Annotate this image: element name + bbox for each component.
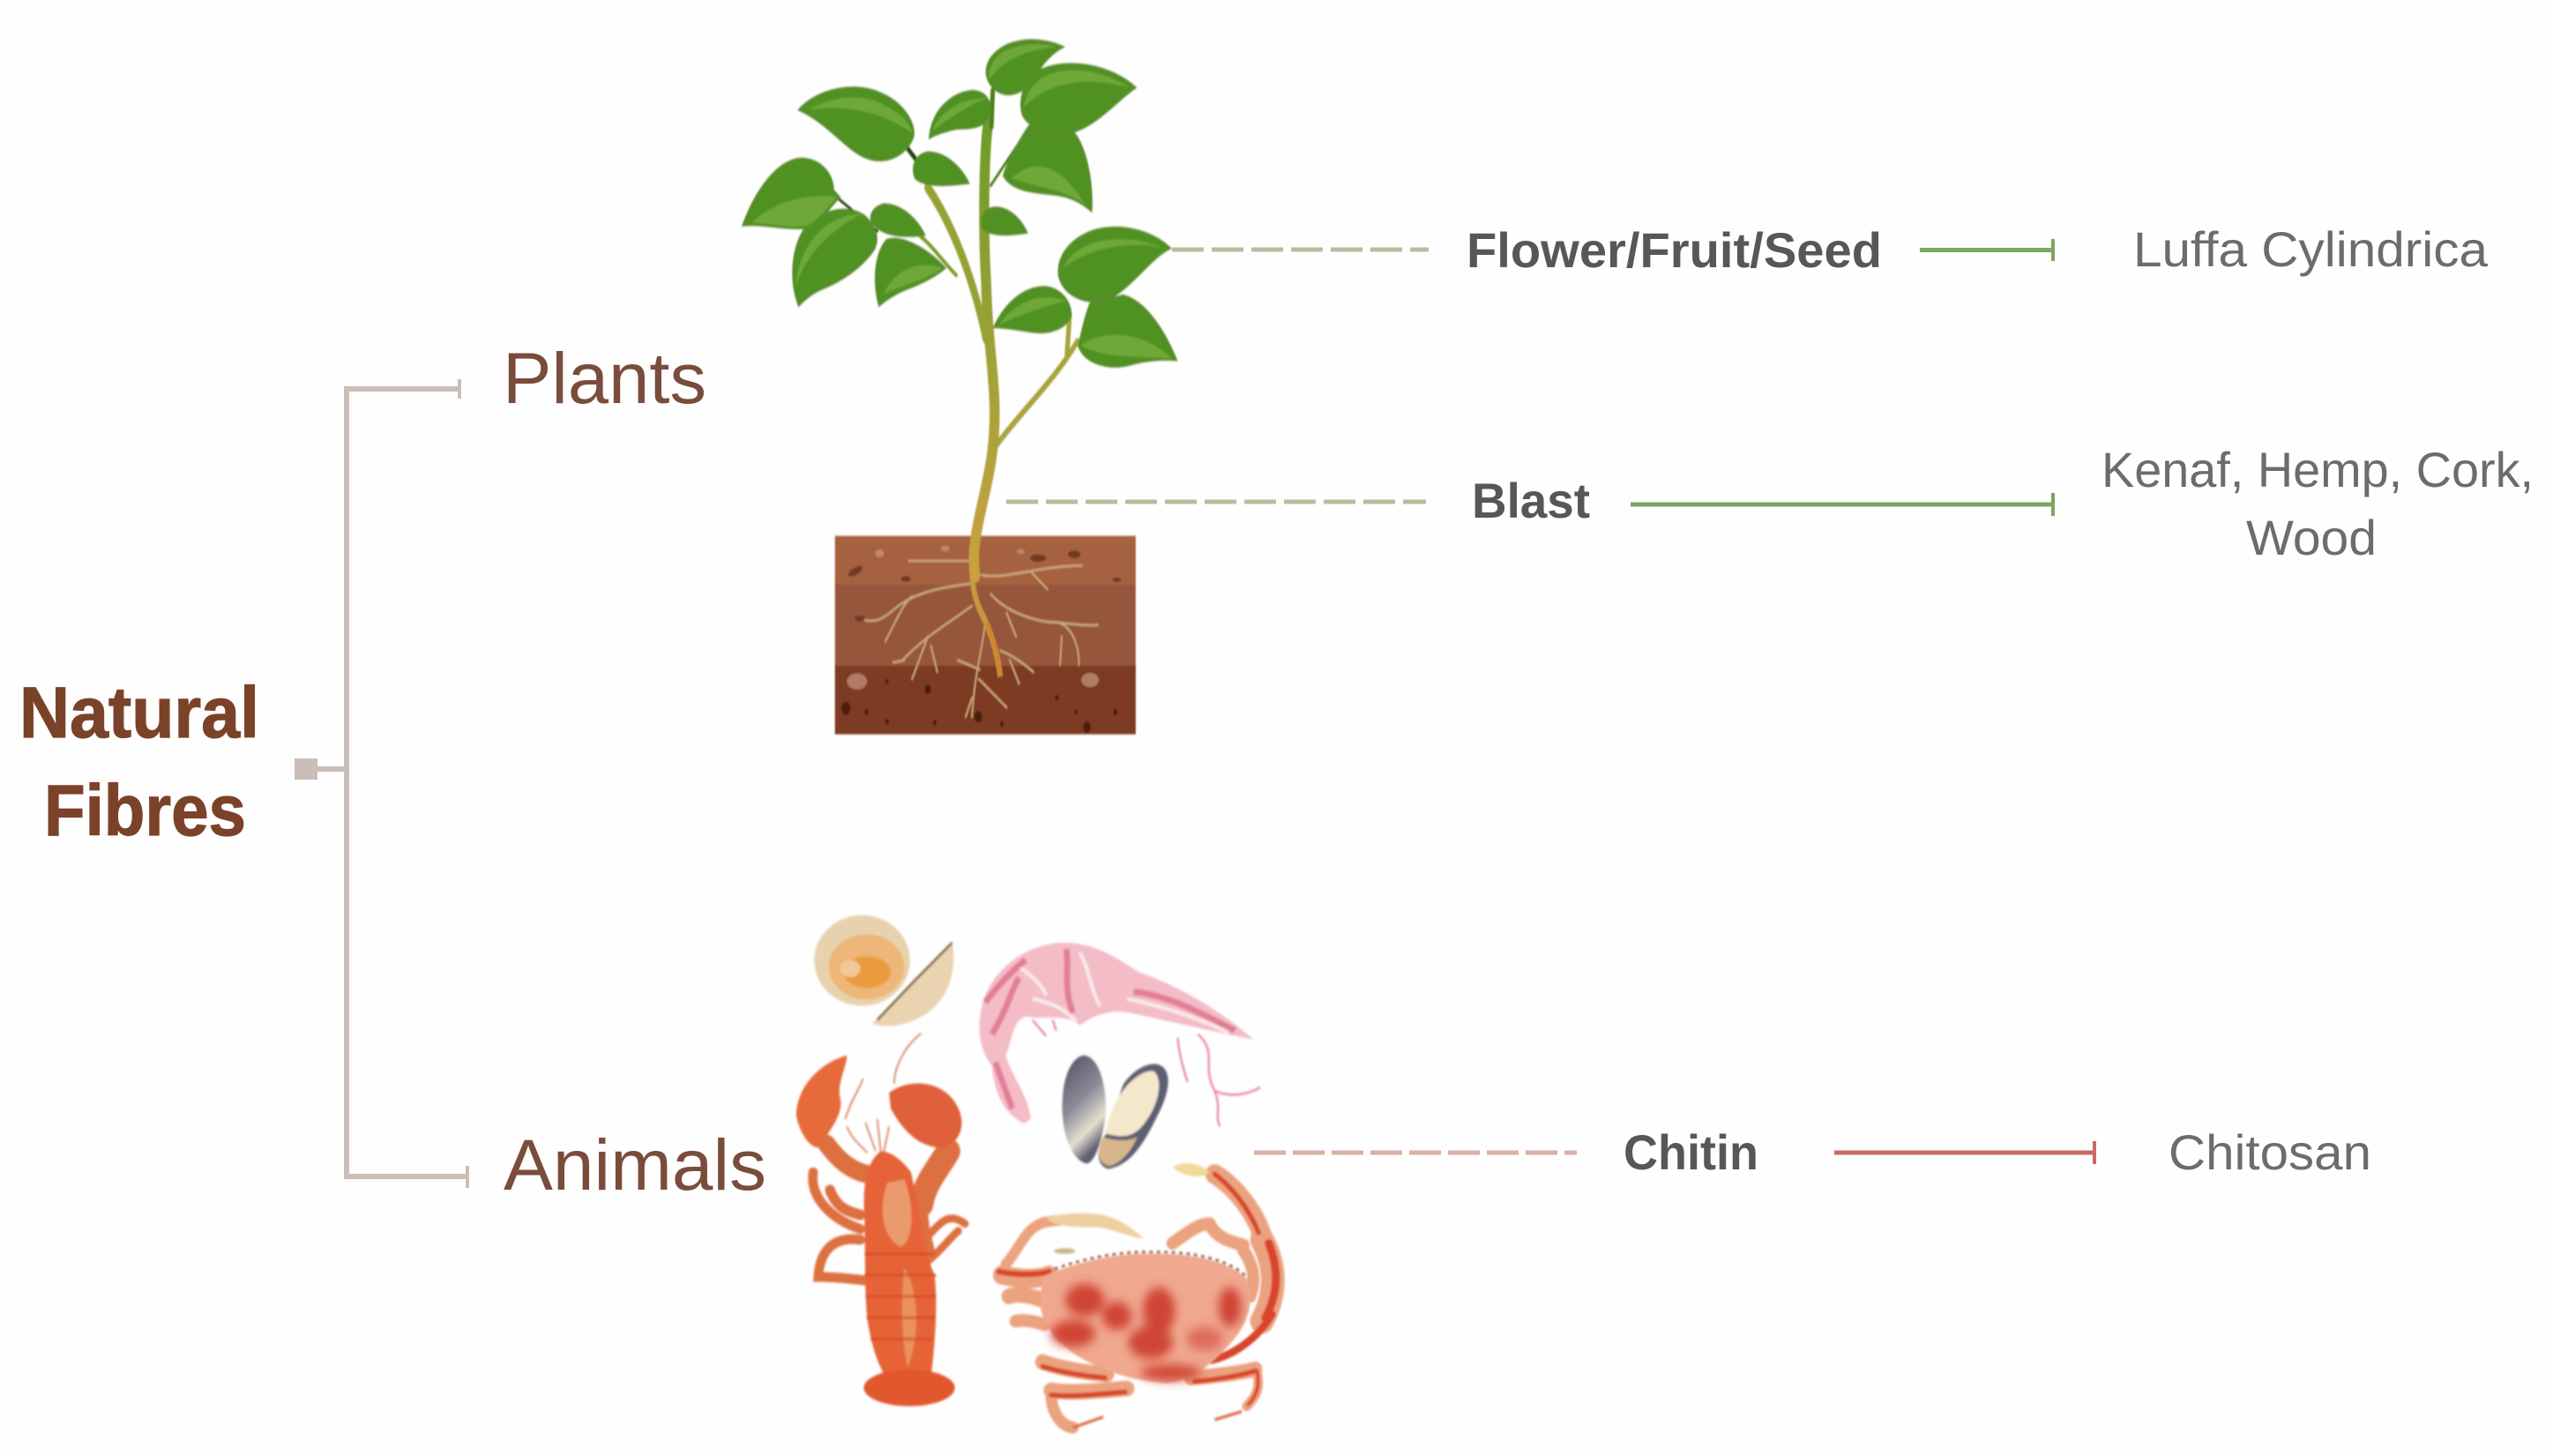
title: Natural Fibres: Fibres: [44, 771, 246, 851]
roots: [865, 561, 1098, 717]
shrimp: [980, 943, 1260, 1126]
branch: Chitin: Chitosan: [2169, 1124, 2371, 1180]
illustration: plant with soil and roots: [743, 41, 1176, 735]
branch: Flower/Fruit/Seed: Luffa Cylindrica: [2133, 221, 2489, 277]
branch: Blast: [1006, 442, 2534, 565]
crab: [999, 1163, 1276, 1428]
soil block: [835, 536, 1136, 735]
branch: Flower/Fruit/Seed: Flower/Fruit/Seed: [1467, 222, 1882, 278]
branch: Blast: Wood: [2246, 510, 2377, 565]
branch: Flower/Fruit/Seed: [1172, 221, 2489, 278]
heading: Plants: Plants: [503, 339, 706, 419]
title: Natural Fibres: [19, 673, 259, 851]
title: Natural Fibres: Natural: [19, 673, 259, 753]
leaf highlights: [751, 44, 1172, 359]
branch: Chitin: [1254, 1124, 2371, 1180]
heading: Animals: Animals: [504, 1125, 766, 1206]
illustration: shellfish and crustaceans: [796, 915, 1276, 1428]
lobster: [796, 1034, 965, 1407]
stems: [837, 91, 1078, 575]
branch: Blast: Blast: [1472, 473, 1590, 528]
scallop: [814, 915, 953, 1026]
bracket connector: [295, 379, 468, 1188]
leaves: [743, 41, 1176, 367]
branch: Blast: Kenaf, Hemp, Cork,: [2101, 442, 2534, 497]
mussel: [1063, 1056, 1168, 1169]
branch: Chitin: Chitin: [1624, 1124, 1758, 1180]
